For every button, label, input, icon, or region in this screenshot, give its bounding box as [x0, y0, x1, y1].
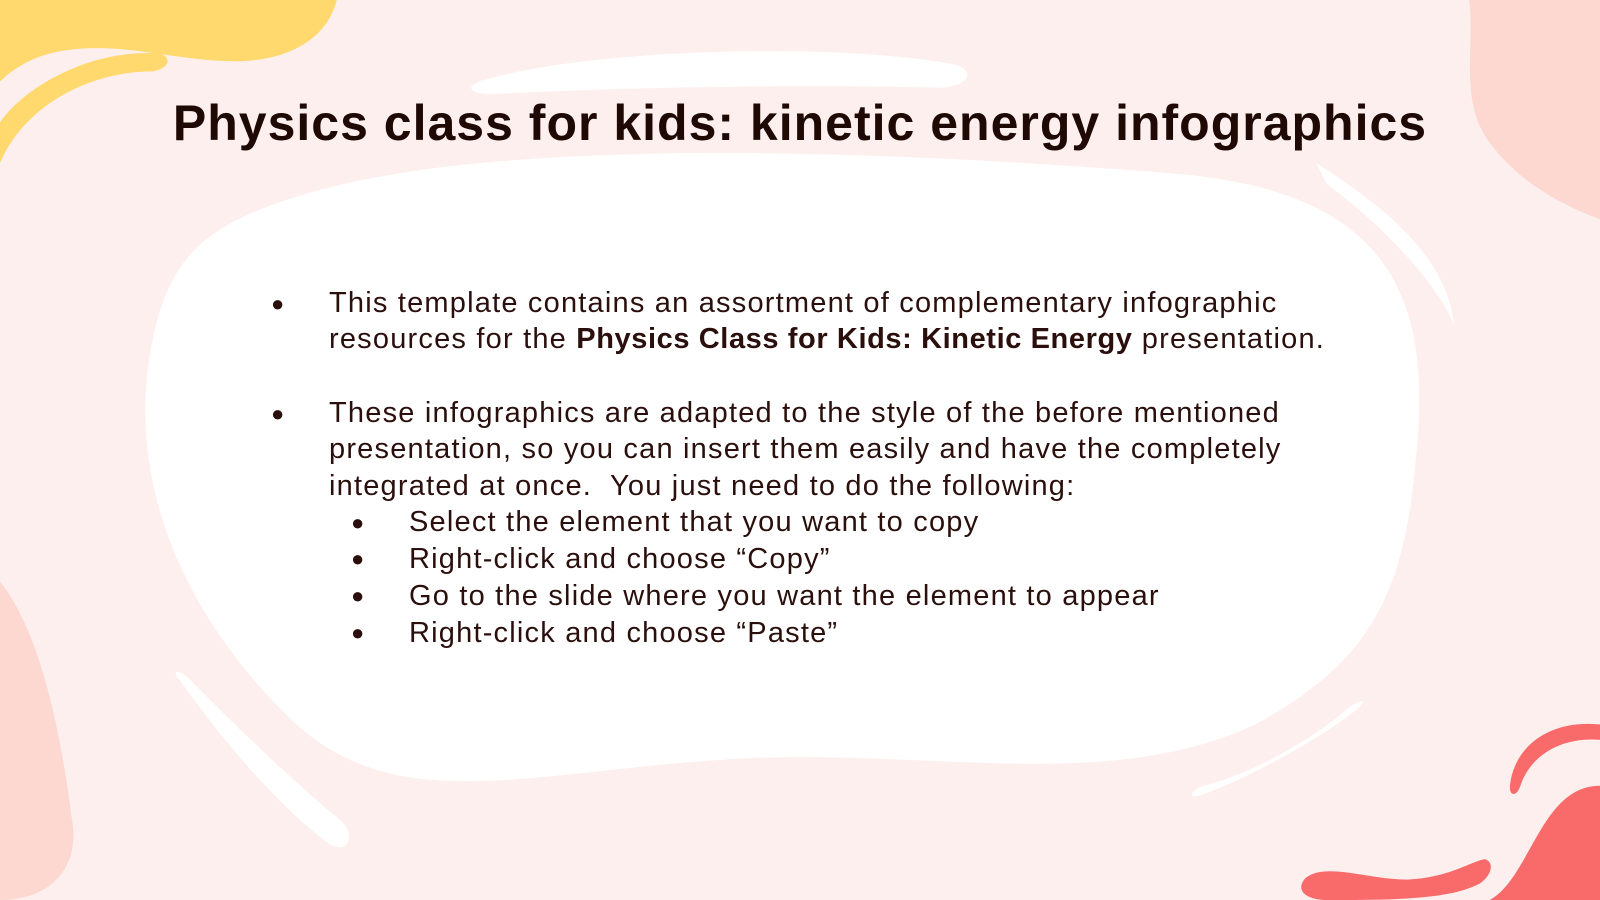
text block: bullets: Right-click and choose “Copy” — [409, 543, 831, 575]
pink blob top-right — [1469, 0, 1600, 219]
text block: bullets: resources for the Physics Class for Kids: Kinetic Energy presentation. — [329, 323, 1325, 355]
white top swoosh — [471, 51, 967, 94]
white bottom-right swoosh — [1192, 701, 1363, 797]
coral shapes bottom-right — [1510, 724, 1600, 794]
text block: bullets: ● — [351, 620, 366, 645]
text block: bullets: Right-click and choose “Paste” — [409, 617, 838, 649]
bullet 1: ● — [271, 291, 286, 316]
text block: bullets: ● — [351, 583, 366, 608]
text block: bullets: These infographics are adapted to the style of the before mentioned — [329, 397, 1280, 429]
white bottom-left swoosh — [176, 672, 349, 847]
text block: bullets: Go to the slide where you want the element to appear — [409, 580, 1160, 612]
pink blob bottom-left — [0, 582, 73, 900]
sub bullets: ● — [351, 510, 366, 535]
white central blob — [145, 153, 1419, 781]
text block: bullets: This template contains an assortment of complementary infographic — [329, 287, 1277, 319]
bullet 2: ● — [271, 401, 286, 426]
text block: bullets: integrated at once. You just need to do the following: — [329, 470, 1075, 502]
title: Physics class for kids: kinetic energy infographics — [173, 95, 1427, 151]
text block: bullets: Select the element that you want to copy — [409, 506, 979, 538]
text block: bullets: ● — [351, 546, 366, 571]
yellow blob top-left — [0, 0, 337, 82]
text block: bullets: presentation, so you can insert them easily and have the completely — [329, 433, 1282, 465]
white right swoosh — [1316, 163, 1454, 327]
